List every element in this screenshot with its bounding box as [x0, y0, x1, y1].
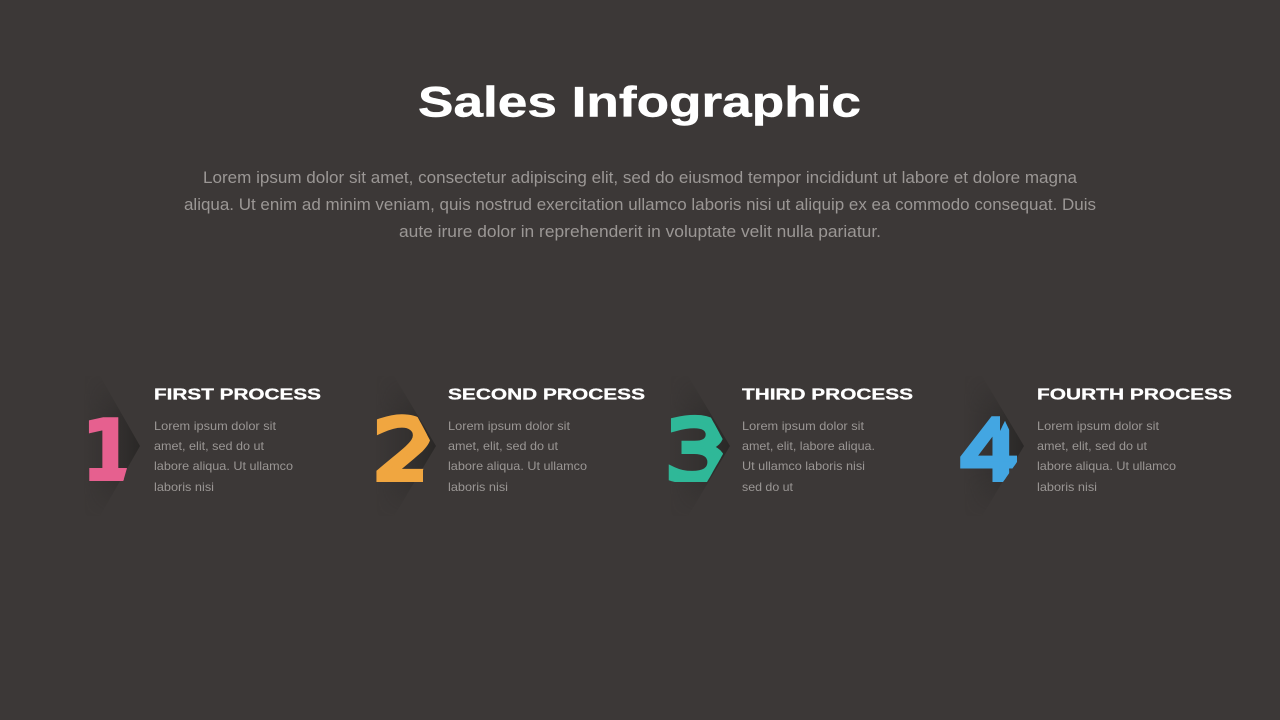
text block: third process: amet, elit, labore aliqua.: [742, 439, 875, 453]
text block: second process: [448, 419, 587, 494]
text block: fourth process: laboris nisi: [1037, 480, 1097, 494]
text block: first process: laboris nisi: [154, 480, 214, 494]
heading: third process: THIRD PROCESS: [742, 386, 913, 404]
text block: second process: Lorem ipsum dolor sit: [448, 419, 571, 433]
panel: second process: [376, 388, 644, 491]
intro paragraph: aute irure dolor in reprehenderit in voluptate velit nulla pariatur.: [399, 222, 881, 241]
icon: arrow shadow and numeral 3: 3: [665, 403, 729, 500]
icon: arrow shadow and numeral 1: [88, 409, 140, 481]
text block: fourth process: labore aliqua. Ut ullamco: [1037, 459, 1176, 473]
text block: first process: [154, 419, 293, 494]
panel: first process: [88, 388, 320, 491]
text block: third process: sed do ut: [742, 480, 794, 494]
text block: fourth process: [1037, 419, 1176, 494]
panel: fourth process: [960, 388, 1232, 491]
heading: fourth process: FOURTH PROCESS: [1037, 386, 1232, 404]
text block: fourth process: Lorem ipsum dolor sit: [1037, 419, 1160, 433]
title: Sales Infographic: [418, 78, 861, 126]
text block: second process: amet, elit, sed do ut: [448, 439, 559, 453]
text block: first process: Lorem ipsum dolor sit: [154, 419, 277, 433]
text block: third process: Lorem ipsum dolor sit: [742, 419, 865, 433]
intro paragraph: aliqua. Ut enim ad minim veniam, quis nostrud exercitation ullamco laboris nisi ut aliquip ex ea commodo consequat. Duis: [184, 195, 1096, 214]
icon: arrow shadow and numeral 2: 2: [373, 402, 437, 499]
text block: second process: laboris nisi: [448, 480, 508, 494]
text block: first process: labore aliqua. Ut ullamco: [154, 459, 293, 473]
text block: third process: Ut ullamco laboris nisi: [742, 459, 865, 473]
intro paragraph: [184, 168, 1096, 241]
panel: third process: [668, 388, 912, 491]
text block: first process: amet, elit, sed do ut: [154, 439, 265, 453]
heading: second process: SECOND PROCESS: [448, 386, 645, 404]
text block: third process: [742, 419, 875, 494]
heading: first process: FIRST PROCESS: [154, 386, 321, 404]
intro paragraph: Lorem ipsum dolor sit amet, consectetur adipiscing elit, sed do eiusmod tempor incididunt ut labore et dolore magna: [203, 168, 1078, 187]
text block: fourth process: amet, elit, sed do ut: [1037, 439, 1148, 453]
text block: second process: labore aliqua. Ut ullamco: [448, 459, 587, 473]
icon: arrow shadow and numeral 1: 1: [81, 402, 136, 501]
icon: arrow shadow and numeral 4: 4: [959, 404, 1021, 500]
